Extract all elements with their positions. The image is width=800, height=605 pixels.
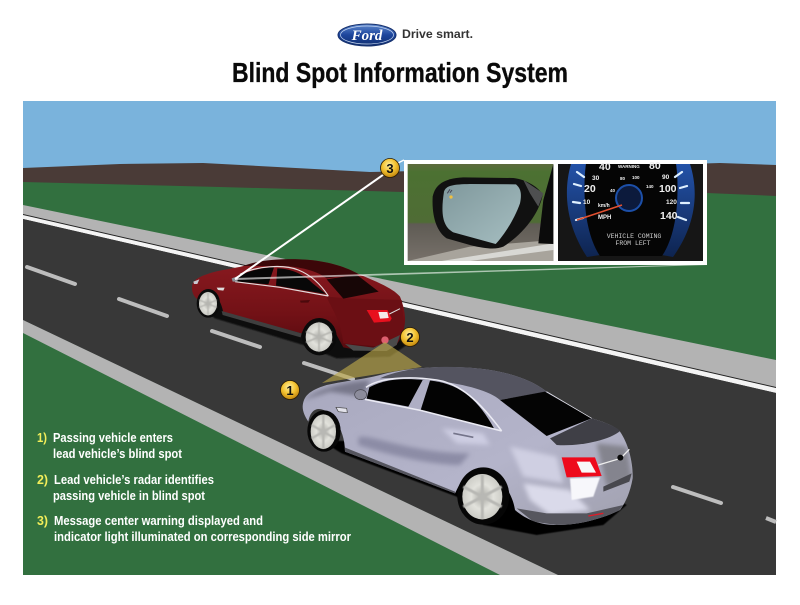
callout lines [235,160,707,280]
car shadow [200,300,407,358]
inset photo frame [404,160,707,265]
chrome trim [235,267,328,296]
chrome trim [365,378,502,431]
mirror housing [433,177,543,248]
badge 1: 1 [286,383,294,398]
step 3 text: indicator light illuminated on corresponding side mirror [54,529,351,544]
photo: instrument cluster: 30 [592,175,600,182]
badge 2 [400,328,420,346]
step 3 text: 3) [37,513,48,528]
photo: instrument cluster: 80 [620,176,626,181]
photo: instrument cluster: 100 [632,175,640,180]
badge 3: 3 [386,161,394,176]
red lead car [192,259,407,358]
Ford logo: Ford [351,28,383,44]
step 2 text: 2) [37,472,48,487]
step 2 text: Lead vehicle’s radar identifies [54,472,214,487]
photo: instrument cluster: km/h [598,203,610,209]
car shadow [320,440,627,535]
photo: instrument cluster: MPH [598,215,611,221]
photo: instrument cluster [558,160,703,261]
step 3 text [37,513,351,544]
taillight [367,310,392,323]
badge 3 [380,158,400,178]
photo: side mirror [408,164,553,261]
front wheel [197,289,220,318]
photo: instrument cluster: 20 [584,183,596,195]
photo: instrument cluster: 40 [599,161,611,173]
road scene background [23,101,776,575]
windows [237,267,274,284]
blind spot indicator [449,195,453,199]
silver passing car [303,367,633,535]
radar beam [322,342,422,383]
taillight [562,457,602,477]
photo: instrument cluster: 120 [666,199,677,206]
title: Blind Spot Information System [232,57,568,88]
photo: instrument cluster: 90 [662,174,670,181]
mirror glass [442,184,521,244]
step 2 text: passing vehicle in blind spot [53,488,206,503]
badge 2: 2 [406,330,414,345]
car body [192,259,405,351]
windows [367,379,423,407]
roof [380,367,547,400]
step 1 text: 1) [37,430,47,445]
pillar [538,164,553,244]
rear wheel [302,318,337,355]
photo: instrument cluster: 100 [659,183,677,195]
step list [37,430,351,544]
photo: instrument cluster: 10 [583,199,591,206]
photo: instrument cluster: FROM LEFT [615,240,651,247]
step 2 text [37,472,214,503]
front wheel [307,410,341,452]
soft body shading [303,380,632,525]
photo: instrument cluster: 140 [646,184,654,189]
photo: instrument cluster: 140 [660,210,678,222]
photo: instrument cluster: VEHICLE COMING [607,233,661,240]
photo: instrument cluster: WARNING [618,164,640,169]
car body [303,367,633,525]
photo: instrument cluster: 80 [649,160,661,172]
rear wheel [457,467,509,525]
step 3 text: Message center warning displayed and [54,513,263,528]
photo: instrument cluster: 40 [610,188,616,193]
radar sensor glow [381,336,389,344]
Ford logo [338,24,396,46]
step 1 text [37,430,183,461]
step 1 text: Passing vehicle enters [53,430,173,445]
badge 1 [280,380,300,400]
tagline: Drive smart. [402,29,473,41]
step 1 text: lead vehicle’s blind spot [53,446,183,461]
